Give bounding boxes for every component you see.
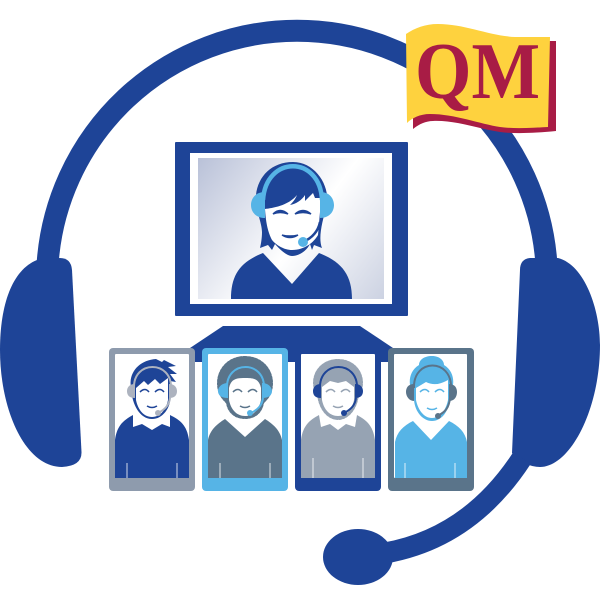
monitor frame (175, 142, 408, 316)
card 1 frame (109, 348, 195, 491)
card 3 frame (295, 348, 381, 491)
main presenter (231, 162, 352, 299)
presenter face (265, 193, 320, 250)
card 4 person (395, 356, 467, 478)
card 2 frame (202, 348, 288, 491)
QM logo (406, 24, 556, 133)
boom microphone arm (385, 458, 522, 553)
presenter headset (263, 166, 322, 200)
presenter eyes and smile (273, 210, 311, 238)
presenter body (231, 253, 352, 299)
card 1 person (115, 359, 189, 478)
card 1 (109, 348, 195, 491)
presenter ear cups (251, 192, 334, 218)
presenter hair (256, 162, 327, 256)
monitor screen (198, 158, 384, 299)
headset band (48, 31, 546, 265)
logo shadow ribbon (413, 41, 556, 133)
card 2 person (208, 357, 282, 478)
card 3 (295, 348, 381, 491)
card 3 person (301, 360, 375, 478)
card 4 frame (388, 348, 474, 491)
logo letters: QM (415, 26, 540, 116)
microphone (323, 529, 393, 585)
right ear cup (512, 258, 600, 467)
monitor (175, 142, 408, 362)
presenter microphone arm (303, 222, 320, 242)
left ear cup (0, 258, 82, 467)
presenter microphone (298, 237, 308, 247)
logo flag (406, 24, 550, 128)
monitor screen border (190, 153, 392, 304)
monitor stand (190, 326, 393, 362)
card 4 (388, 348, 474, 491)
card 2 (202, 348, 288, 491)
